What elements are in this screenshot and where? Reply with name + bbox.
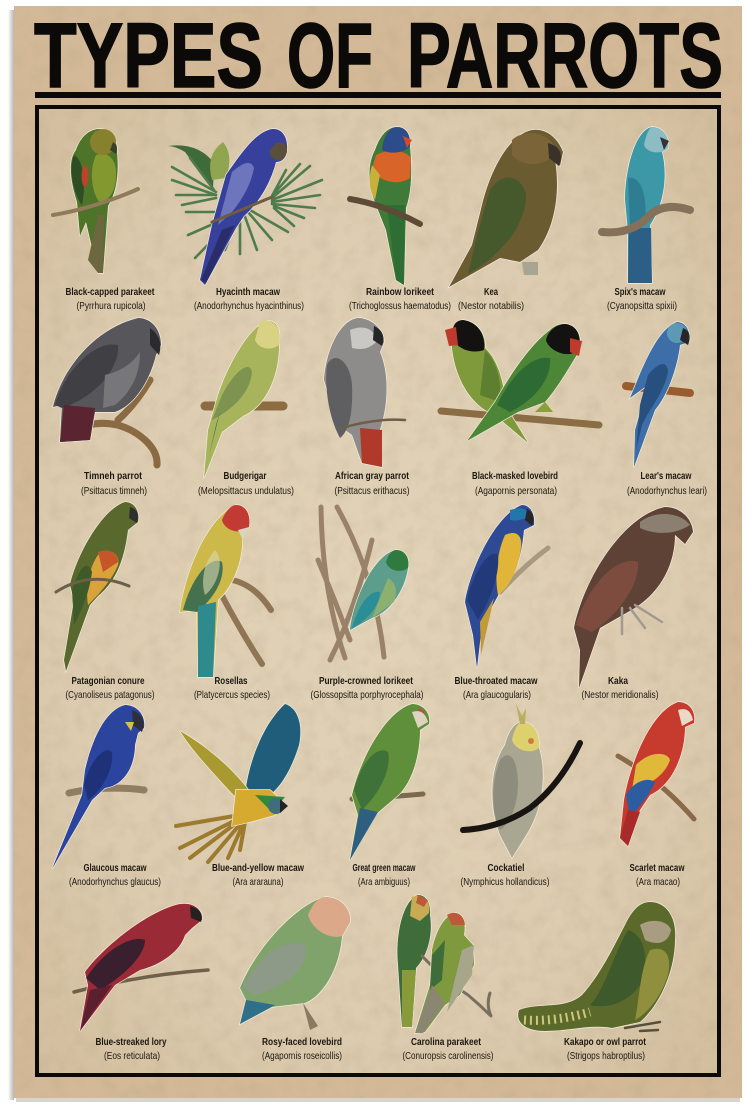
perch xyxy=(500,548,548,592)
label xyxy=(262,1036,342,1062)
label: (Cyanoliseus patagonus) xyxy=(66,689,154,701)
bird illustration xyxy=(240,897,350,1030)
species: Black-masked lovebird xyxy=(441,320,599,497)
perch xyxy=(618,756,694,819)
perch xyxy=(56,579,129,592)
label xyxy=(460,862,550,888)
label: (Cyanopsitta spixii) xyxy=(607,300,677,312)
bird illustration: right lovebird xyxy=(467,324,582,441)
label: Patagonian conure xyxy=(72,675,145,687)
perch xyxy=(220,580,271,664)
bird illustration xyxy=(52,705,144,869)
label: (Psittacus erithacus) xyxy=(334,485,410,497)
title xyxy=(34,5,723,107)
label: Purple-crowned lorikeet xyxy=(319,675,413,687)
species: Kea xyxy=(449,130,563,312)
bird illustration xyxy=(204,321,280,478)
label: Black-capped parakeet xyxy=(66,286,155,298)
label: (Anodorhynchus glaucus) xyxy=(69,876,161,888)
label: (Psittacus timneh) xyxy=(81,485,147,497)
bird illustration xyxy=(625,127,669,283)
palm leaves and bird illustration xyxy=(168,129,322,285)
bird illustration xyxy=(180,505,249,677)
label xyxy=(81,470,147,497)
label xyxy=(194,675,270,701)
label: Rosy-faced lovebird xyxy=(262,1036,342,1048)
bird illustration xyxy=(620,702,694,846)
bird illustration xyxy=(64,502,138,671)
species: African gray parrot xyxy=(324,318,410,497)
label: Cockatiel xyxy=(488,862,525,874)
label: African gray parrot xyxy=(335,470,409,482)
bird illustration xyxy=(518,902,675,1031)
bird illustration xyxy=(350,550,408,630)
label: (Pyrrhura rupicola) xyxy=(76,300,146,312)
species: Black-capped parakeet xyxy=(53,129,155,312)
bird illustration xyxy=(324,318,387,467)
label xyxy=(96,1036,167,1062)
label xyxy=(194,286,304,312)
species: Blue-streaked lory xyxy=(74,904,208,1062)
species: Great green macaw xyxy=(350,704,429,888)
bird illustration xyxy=(492,704,543,858)
perch xyxy=(602,207,690,232)
label: (Platycercus species) xyxy=(194,689,270,701)
label: (Ara ambiguus) xyxy=(358,876,410,888)
label: (Trichoglossus haematodus) xyxy=(349,300,451,312)
label xyxy=(630,862,685,888)
perch xyxy=(352,794,423,799)
label xyxy=(627,470,707,497)
bird illustration xyxy=(53,318,161,442)
species: Blue-throated macaw xyxy=(454,505,548,701)
label: Carolina parakeet xyxy=(411,1036,481,1048)
bird illustration xyxy=(465,505,534,668)
label xyxy=(334,470,410,497)
bird illustration xyxy=(449,130,563,287)
label: (Strigops habroptilus) xyxy=(567,1050,645,1062)
species: Carolina parakeet xyxy=(397,895,494,1062)
label: Rainbow lorikeet xyxy=(366,286,434,298)
bird illustration xyxy=(369,127,412,285)
perch xyxy=(626,386,690,393)
label: (Conuropsis carolinensis) xyxy=(402,1050,494,1062)
label: Blue-streaked lory xyxy=(96,1036,167,1048)
label xyxy=(66,675,154,701)
label: Kakapo or owl parrot xyxy=(564,1036,646,1048)
label xyxy=(349,286,451,312)
label xyxy=(212,862,305,888)
perch xyxy=(441,411,599,425)
label: (Ara glaucogularis) xyxy=(463,689,531,701)
label xyxy=(454,675,538,701)
label: Kaka xyxy=(608,675,628,687)
label: Timneh parrot xyxy=(84,470,142,482)
perch xyxy=(350,199,420,224)
label xyxy=(310,675,424,701)
perch xyxy=(69,788,144,793)
label: (Eos reticulata) xyxy=(104,1050,160,1062)
species: Cockatiel xyxy=(460,704,580,888)
label: Black-masked lovebird xyxy=(472,470,558,482)
species: Lear's macaw xyxy=(626,322,707,497)
label xyxy=(458,286,524,312)
species: Spix's macaw xyxy=(602,127,690,312)
label: (Nymphicus hollandicus) xyxy=(460,876,550,888)
label xyxy=(402,1036,494,1062)
label: Scarlet macaw xyxy=(630,862,685,874)
bird illustration: left lovebird xyxy=(445,320,528,443)
label: (Anodorhynchus leari) xyxy=(627,485,707,497)
perch xyxy=(205,402,283,410)
perch xyxy=(342,420,405,428)
species: Budgerigar xyxy=(198,321,294,497)
label xyxy=(69,862,161,888)
label: (Nestor notabilis) xyxy=(458,300,524,312)
branch xyxy=(422,956,491,1016)
species: Scarlet macaw xyxy=(618,702,694,888)
species: Kaka xyxy=(574,507,693,701)
label xyxy=(607,286,677,312)
title rule xyxy=(35,92,721,98)
label: (Melopsittacus undulatus) xyxy=(198,485,294,497)
label: Rosellas xyxy=(214,675,248,687)
label: (Ara macao) xyxy=(636,876,680,888)
label: (Nestor meridionalis) xyxy=(582,689,658,701)
branch xyxy=(463,743,580,830)
label: (Agapornis roseicollis) xyxy=(262,1050,342,1062)
species: Hyacinth macaw xyxy=(168,129,322,312)
branches xyxy=(318,507,384,660)
species: Patagonian conure xyxy=(56,502,154,701)
label: Budgerigar xyxy=(224,470,266,482)
right parakeet xyxy=(415,913,474,1033)
label: (Anodorhynchus hyacinthinus) xyxy=(194,300,304,312)
bird illustration xyxy=(630,322,690,467)
species: Rosy-faced lovebird xyxy=(240,897,350,1062)
label: (Agapornis personata) xyxy=(475,485,557,497)
label: Blue-and-yellow macaw xyxy=(212,862,305,874)
perch xyxy=(88,380,157,465)
left parakeet xyxy=(397,895,431,1027)
bird illustration xyxy=(574,507,693,688)
label: Spix's macaw xyxy=(614,286,666,298)
bird illustration xyxy=(53,129,138,273)
title: OF xyxy=(287,5,373,107)
label xyxy=(564,1036,646,1062)
species: Purple-crowned lorikeet xyxy=(310,507,424,701)
label: (Glossopsitta porphyrocephala) xyxy=(310,689,424,701)
species: Blue-and-yellow macaw xyxy=(176,704,305,888)
species: Timneh parrot xyxy=(53,318,161,497)
label xyxy=(198,470,294,497)
title: TYPES xyxy=(34,5,263,107)
bird illustration xyxy=(350,704,429,860)
label xyxy=(582,675,658,701)
label: Hyacinth macaw xyxy=(216,286,281,298)
label: Blue-throated macaw xyxy=(454,675,538,687)
label xyxy=(472,470,558,497)
chart frame xyxy=(37,107,719,1075)
species: Rosellas xyxy=(180,505,271,701)
label xyxy=(66,286,155,312)
species: Glaucous macaw xyxy=(52,705,161,888)
label: (Ara ararauna) xyxy=(232,876,284,888)
perch xyxy=(74,970,208,992)
label: Great green macaw xyxy=(352,862,416,874)
label xyxy=(352,862,416,888)
label: Lear's macaw xyxy=(640,470,692,482)
label: Kea xyxy=(484,286,498,298)
species: Kakapo or owl parrot xyxy=(518,902,675,1062)
species: Rainbow lorikeet xyxy=(349,127,451,312)
bird illustration xyxy=(176,704,300,862)
label: Glaucous macaw xyxy=(84,862,147,874)
bird illustration xyxy=(80,904,202,1031)
